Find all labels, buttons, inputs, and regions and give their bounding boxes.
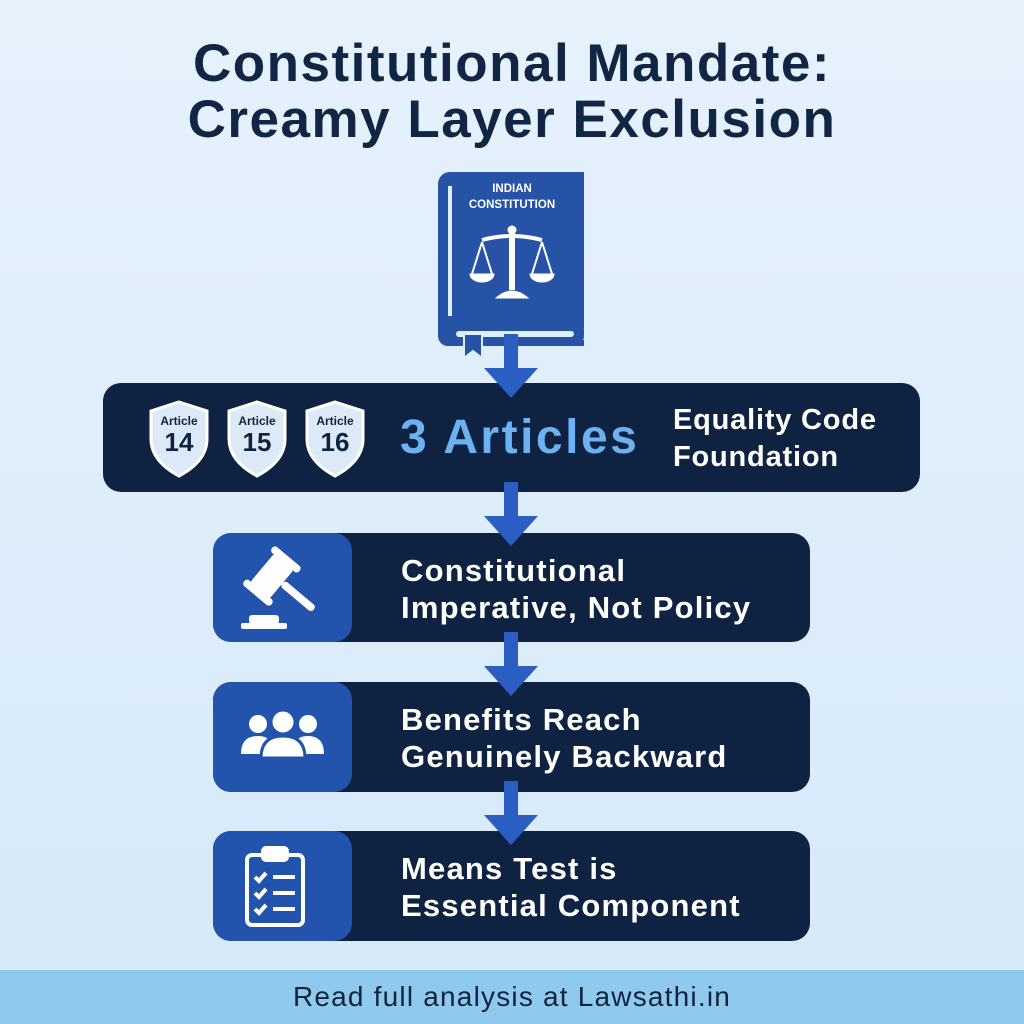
text: equality code foundation: Foundation xyxy=(673,441,839,473)
text: Means Test is xyxy=(401,851,618,886)
panel: benefits xyxy=(213,682,810,792)
footer: Read full analysis at Lawsathi.in xyxy=(293,981,731,1012)
arrow: imperative to benefits xyxy=(484,632,538,696)
title xyxy=(188,34,836,149)
icon: article shields: Article xyxy=(160,414,198,428)
icon: article shields: 16 xyxy=(321,427,349,457)
icon: article shields xyxy=(150,400,364,478)
icon: people xyxy=(213,682,352,792)
icon: article shields: 15 xyxy=(243,427,271,457)
arrow: articles to imperative xyxy=(484,482,538,546)
icon: article shields: Article xyxy=(316,414,354,428)
icon: clipboard xyxy=(213,831,352,941)
text: Constitutional xyxy=(401,553,626,588)
icon: gavel xyxy=(213,533,352,642)
text: Benefits Reach xyxy=(401,702,642,737)
icon: constitution book xyxy=(438,172,584,356)
text: Genuinely Backward xyxy=(401,739,728,774)
text xyxy=(401,702,728,774)
text: equality code foundation: Equality Code xyxy=(673,404,877,436)
panel: means test xyxy=(213,831,810,941)
icon: article shields: Article xyxy=(238,414,276,428)
heading: 3 articles: 3 Articles xyxy=(400,411,639,464)
panel: 3 articles xyxy=(103,383,920,492)
text: Essential Component xyxy=(401,888,741,923)
footer xyxy=(0,970,1024,1024)
title: Constitutional Mandate: xyxy=(193,34,831,93)
arrow: book to articles xyxy=(484,334,538,398)
icon: constitution book: CONSTITUTION xyxy=(469,199,555,211)
text xyxy=(401,553,751,625)
text xyxy=(401,851,741,923)
title: Creamy Layer Exclusion xyxy=(188,90,836,149)
arrow: benefits to means test xyxy=(484,781,538,845)
panel: constitutional imperative xyxy=(213,533,810,642)
text: Imperative, Not Policy xyxy=(401,590,751,625)
icon: article shields: 14 xyxy=(165,427,194,457)
text: equality code foundation xyxy=(673,404,877,473)
icon: constitution book: INDIAN xyxy=(492,183,532,195)
